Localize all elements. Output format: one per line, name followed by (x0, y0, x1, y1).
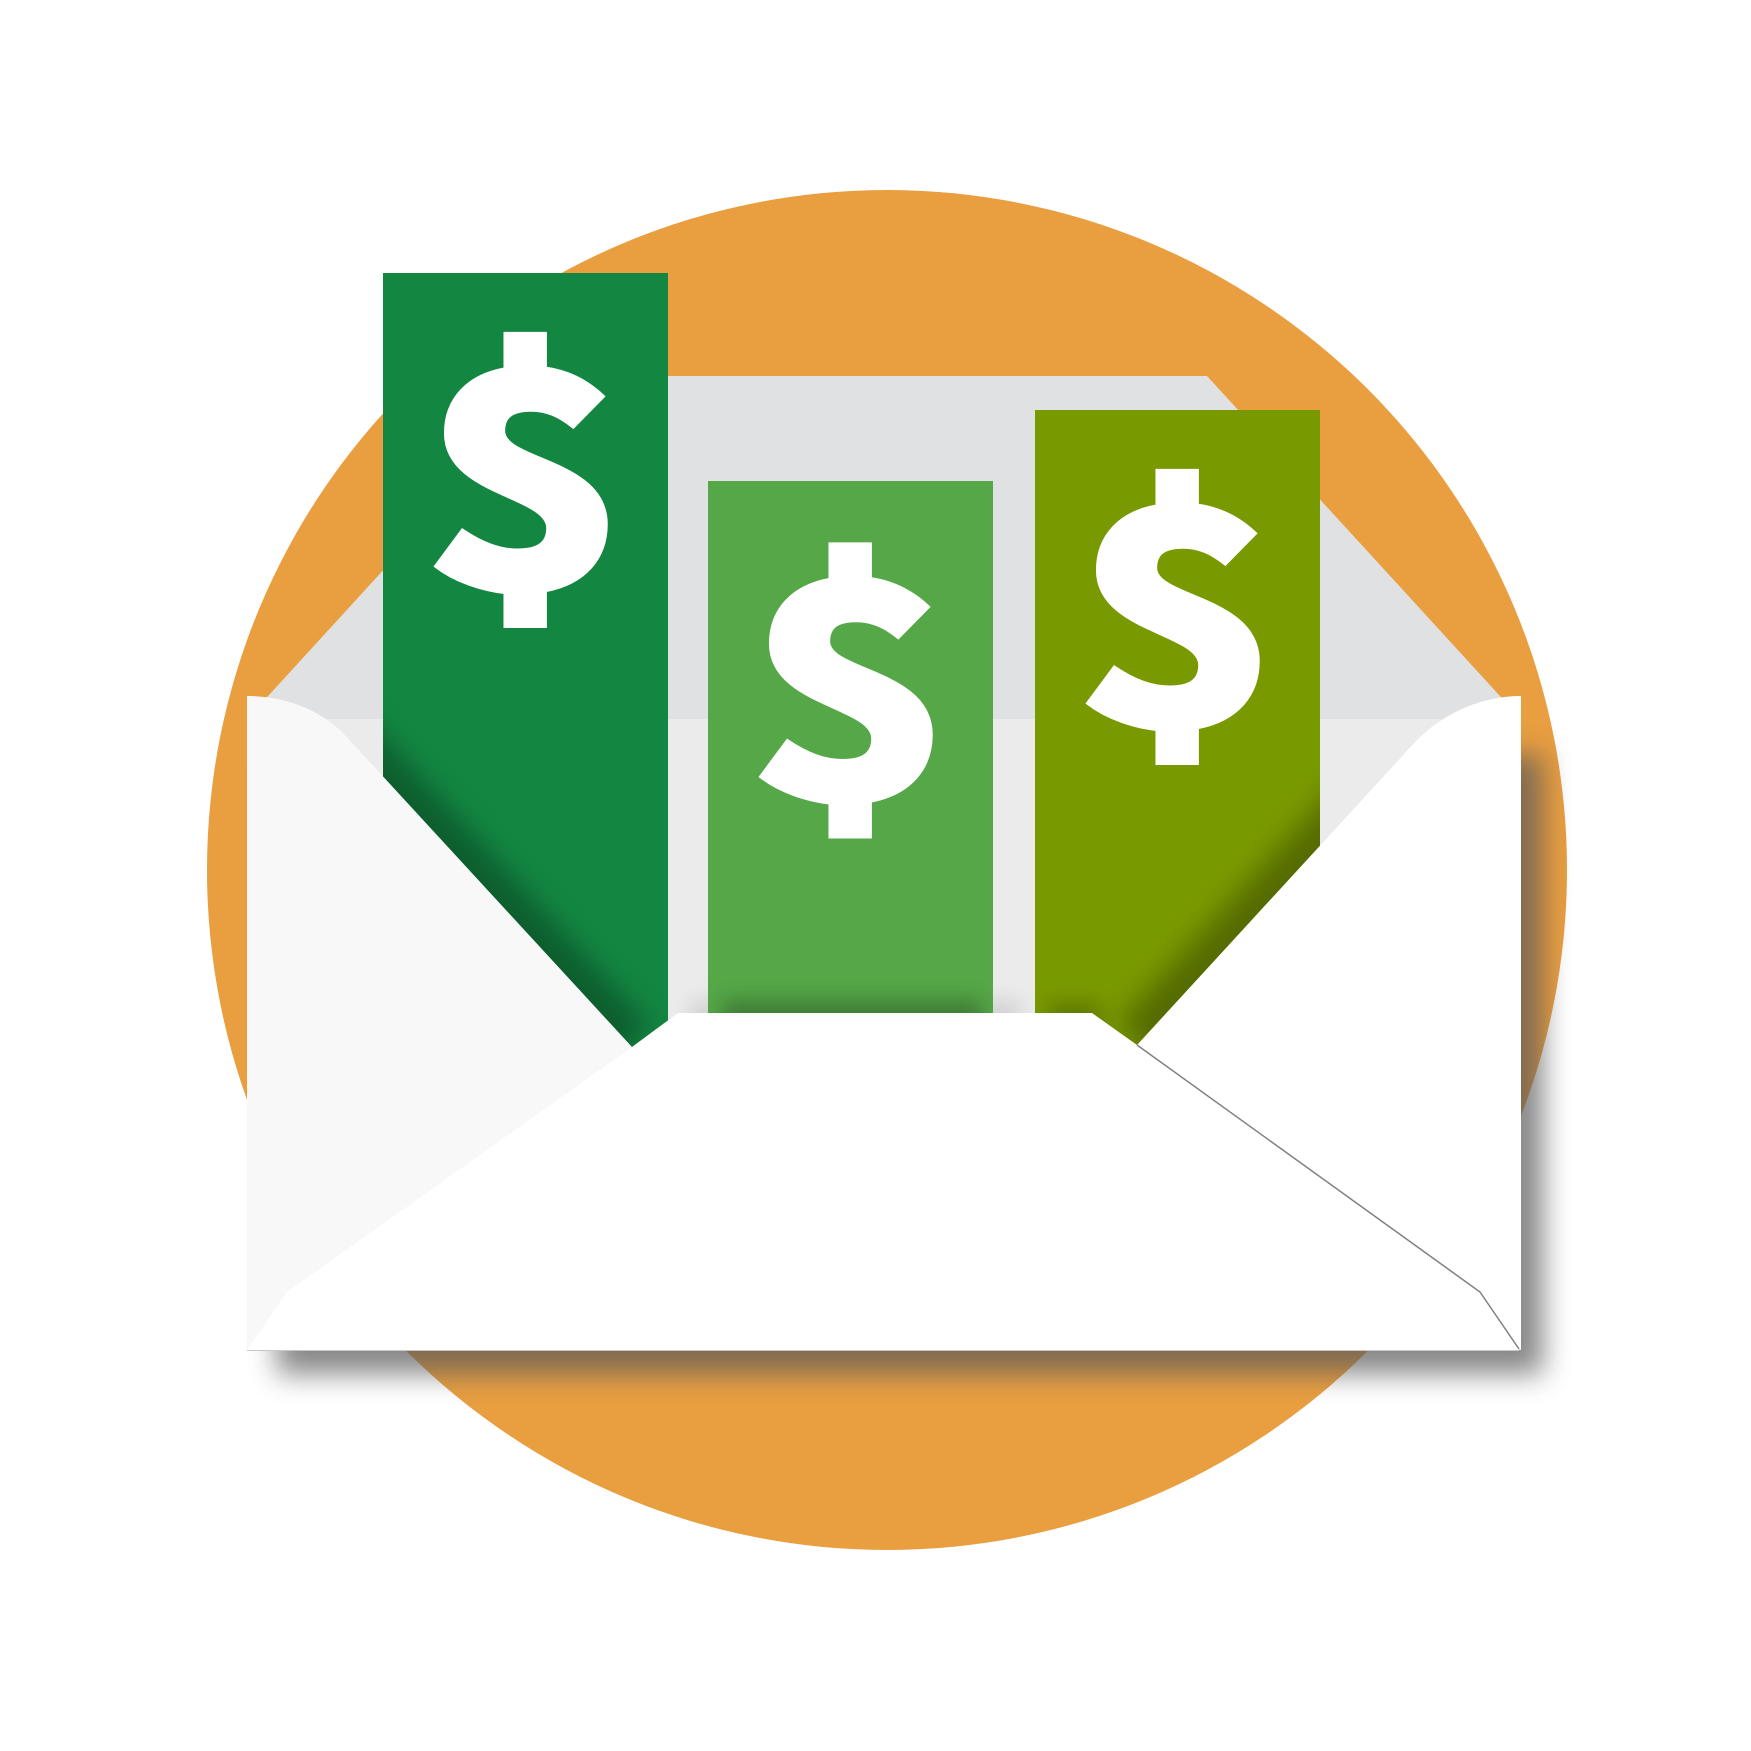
envelope left flap (247, 696, 632, 1350)
envelope right flap (1137, 696, 1521, 1349)
pocket bottom edge (247, 1350, 1519, 1352)
bill: dark green (383, 241, 668, 1073)
dollar sign: dark green bill: $ (421, 241, 630, 676)
dollar sign: olive green bill: $ (1073, 378, 1282, 813)
pocket crease line (1137, 1045, 1519, 1349)
envelope drop shadow (277, 755, 1543, 1374)
background circle (207, 190, 1567, 1550)
envelope front pocket (247, 1013, 1519, 1350)
flap shadows on bills (267, 677, 1501, 1331)
bill: mid green (708, 452, 993, 1021)
dollar sign: mid green bill: $ (746, 452, 955, 886)
envelope back panel (247, 376, 1521, 1350)
bill: olive green (1035, 378, 1320, 1050)
